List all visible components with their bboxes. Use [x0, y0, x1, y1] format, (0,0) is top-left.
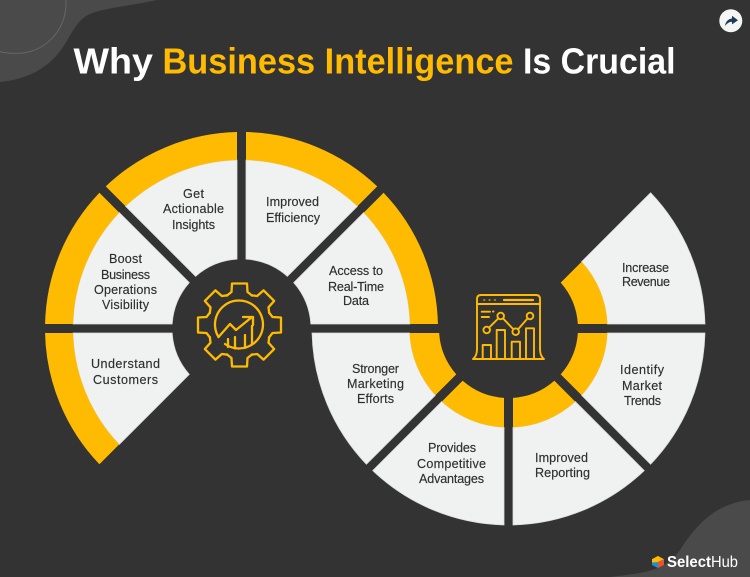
segment: Boost Business Operations Visibility: Operations — [94, 283, 157, 297]
segment: Provides Competitive Advantages: Provides — [428, 441, 476, 455]
segment: Identify Market Trends — [561, 333, 705, 464]
icon: dashboard chart window — [473, 295, 544, 359]
segment: Stronger Marketing Efforts: Efforts — [357, 392, 394, 406]
decorative blob: bottom right — [610, 500, 750, 577]
segment: Stronger Marketing Efforts: Stronger — [352, 362, 399, 376]
segment: Identify Market Trends: Trends — [624, 394, 661, 408]
decorative blob: top left — [0, 0, 157, 82]
icon: gear with growth chart — [198, 284, 281, 366]
segment: Boost Business Operations Visibility — [45, 193, 189, 324]
logo: SelectHub — [652, 554, 738, 571]
segment: Identify Market Trends: Identify — [620, 363, 665, 377]
segment: Identify Market Trends: Market — [622, 379, 662, 393]
title: Is Crucial — [523, 40, 676, 82]
segment: Improved Reporting: Reporting — [535, 466, 590, 480]
segment: Get Actionable Insights — [106, 132, 237, 276]
segment: Understand Customers — [45, 333, 189, 464]
segment: Boost Business Operations Visibility: Business — [101, 268, 150, 282]
segment: Improved Reporting — [513, 381, 644, 525]
segment: Get Actionable Insights: Insights — [172, 218, 215, 232]
segment: Provides Competitive Advantages: Advantages — [419, 472, 484, 486]
segment: Get Actionable Insights: Get — [183, 187, 204, 201]
logo: SelectHub: Select — [667, 554, 711, 571]
share icon — [719, 9, 742, 32]
left wheel — [45, 132, 438, 464]
title: Why — [74, 40, 154, 82]
segment: Access to Real-Time Data: Real-Time — [328, 280, 384, 294]
segment: Improved Efficiency — [246, 132, 377, 276]
segment: Get Actionable Insights: Actionable — [163, 202, 224, 216]
segment: Boost Business Operations Visibility: Visibility — [102, 298, 150, 312]
logo: SelectHub: Hub — [711, 554, 738, 571]
segment: Increase Revenue: Increase — [622, 261, 669, 275]
right wheel — [312, 193, 705, 525]
title: Business Intelligence — [162, 40, 514, 82]
segment: Access to Real-Time Data: Data — [343, 294, 369, 308]
segment: Boost Business Operations Visibility: Boost — [109, 252, 142, 266]
segment: Improved Efficiency: Efficiency — [266, 211, 321, 225]
segment: Increase Revenue: Revenue — [622, 275, 670, 289]
segment: Access to Real-Time Data — [294, 193, 438, 324]
segment: Understand Customers: Understand — [91, 357, 160, 371]
segment: Access to Real-Time Data: Access to — [329, 264, 383, 278]
segment: Improved Efficiency: Improved — [266, 195, 319, 209]
segment: Stronger Marketing Efforts: Marketing — [347, 377, 404, 391]
segment: Increase Revenue — [561, 193, 705, 324]
segment: Understand Customers: Customers — [93, 373, 158, 387]
segment: Provides Competitive Advantages — [373, 381, 504, 525]
segment: Stronger Marketing Efforts — [312, 333, 456, 464]
segment: Improved Reporting: Improved — [535, 451, 588, 465]
segment: Provides Competitive Advantages: Competitive — [417, 457, 486, 471]
